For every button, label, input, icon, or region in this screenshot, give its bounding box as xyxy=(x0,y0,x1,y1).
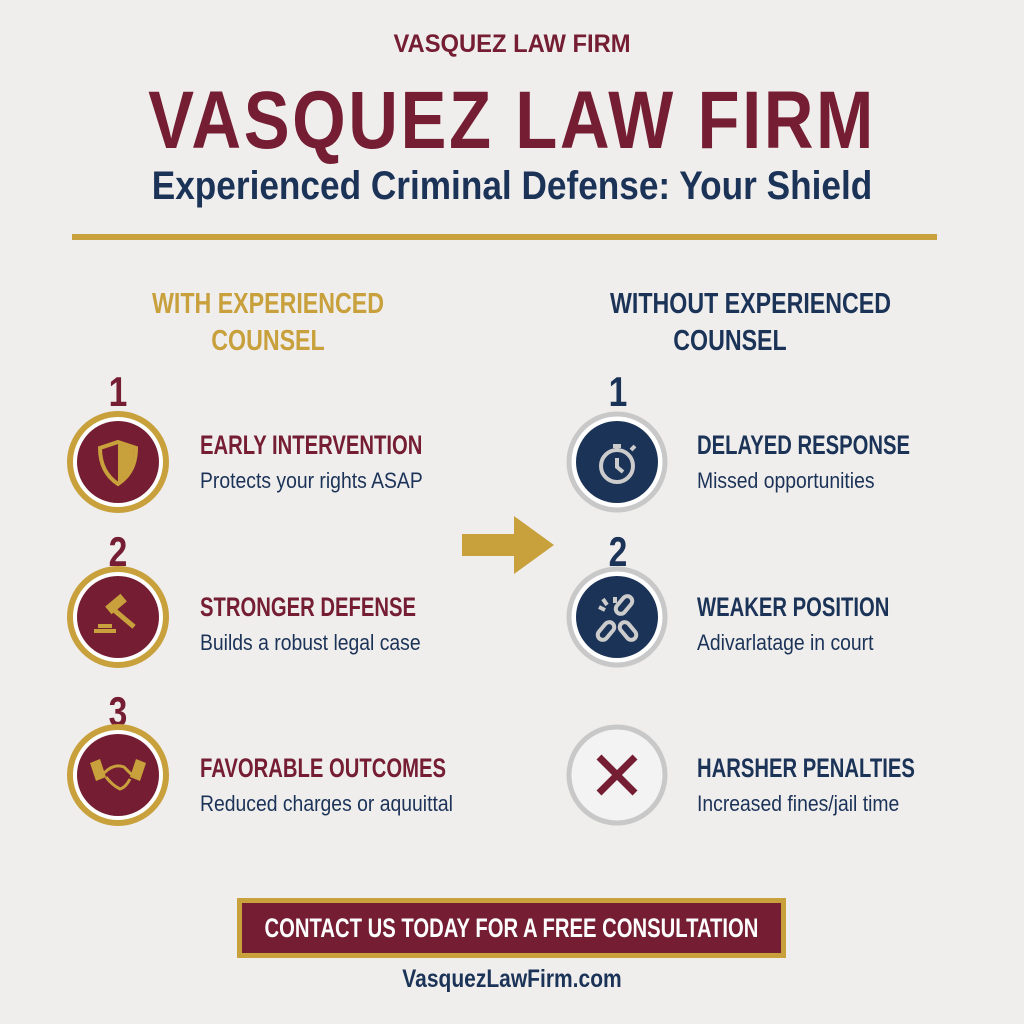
heading: with counsel: COUNSEL xyxy=(211,325,325,357)
number 2: 2 xyxy=(609,528,627,575)
arrow xyxy=(462,516,554,574)
item: favorable outcomes xyxy=(67,688,453,826)
top label: VASQUEZ LAW FIRM xyxy=(393,30,631,58)
item: stronger defense: Builds a robust legal case xyxy=(200,630,421,655)
heading: without counsel: COUNSEL xyxy=(673,325,787,357)
text: WEAKER POSITION xyxy=(697,592,889,622)
icon: broken chain xyxy=(566,566,668,668)
number 2: 2 xyxy=(109,528,127,575)
heading: with counsel: WITH EXPERIENCED xyxy=(152,288,384,320)
item: harsher penalties xyxy=(566,724,915,826)
item: favorable outcomes: Reduced charges or aquuittal xyxy=(200,791,453,816)
title: VASQUEZ LAW FIRM xyxy=(148,75,876,166)
item: stronger defense xyxy=(67,528,421,668)
item: weaker position: Adivarlatage in court xyxy=(697,630,873,655)
icon: handshake xyxy=(67,724,169,826)
icon: gavel xyxy=(67,566,169,668)
CTA text: CONTACT US TODAY FOR A FREE CONSULTATION xyxy=(265,913,758,943)
icon: stopwatch xyxy=(566,412,668,512)
item: harsher penalties: Increased fines/jail time xyxy=(697,791,899,816)
icon: x xyxy=(566,724,668,826)
CTA button xyxy=(237,898,786,958)
heading: without counsel: WITHOUT EXPERIENCED xyxy=(610,288,891,320)
number 3: 3 xyxy=(109,688,127,735)
number 1: 1 xyxy=(609,368,627,415)
text: EARLY INTERVENTION xyxy=(200,430,422,460)
text: FAVORABLE OUTCOMES xyxy=(200,753,446,783)
item: early intervention xyxy=(67,368,423,513)
number 1: 1 xyxy=(109,368,127,415)
item: delayed response xyxy=(566,368,910,512)
website: VasquezLawFirm.com xyxy=(402,965,622,993)
item: weaker position xyxy=(566,528,889,668)
heading: with counsel xyxy=(152,288,384,357)
subtitle: Experienced Criminal Defense: Your Shield xyxy=(152,164,872,208)
text: DELAYED RESPONSE xyxy=(697,430,910,460)
text: STRONGER DEFENSE xyxy=(200,592,416,622)
item: early intervention: Protects your rights ASAP xyxy=(200,468,423,493)
heading: without counsel xyxy=(610,288,891,357)
text: HARSHER PENALTIES xyxy=(697,753,915,783)
item: delayed response: Missed opportunities xyxy=(697,468,875,493)
icon: shield xyxy=(67,411,169,513)
